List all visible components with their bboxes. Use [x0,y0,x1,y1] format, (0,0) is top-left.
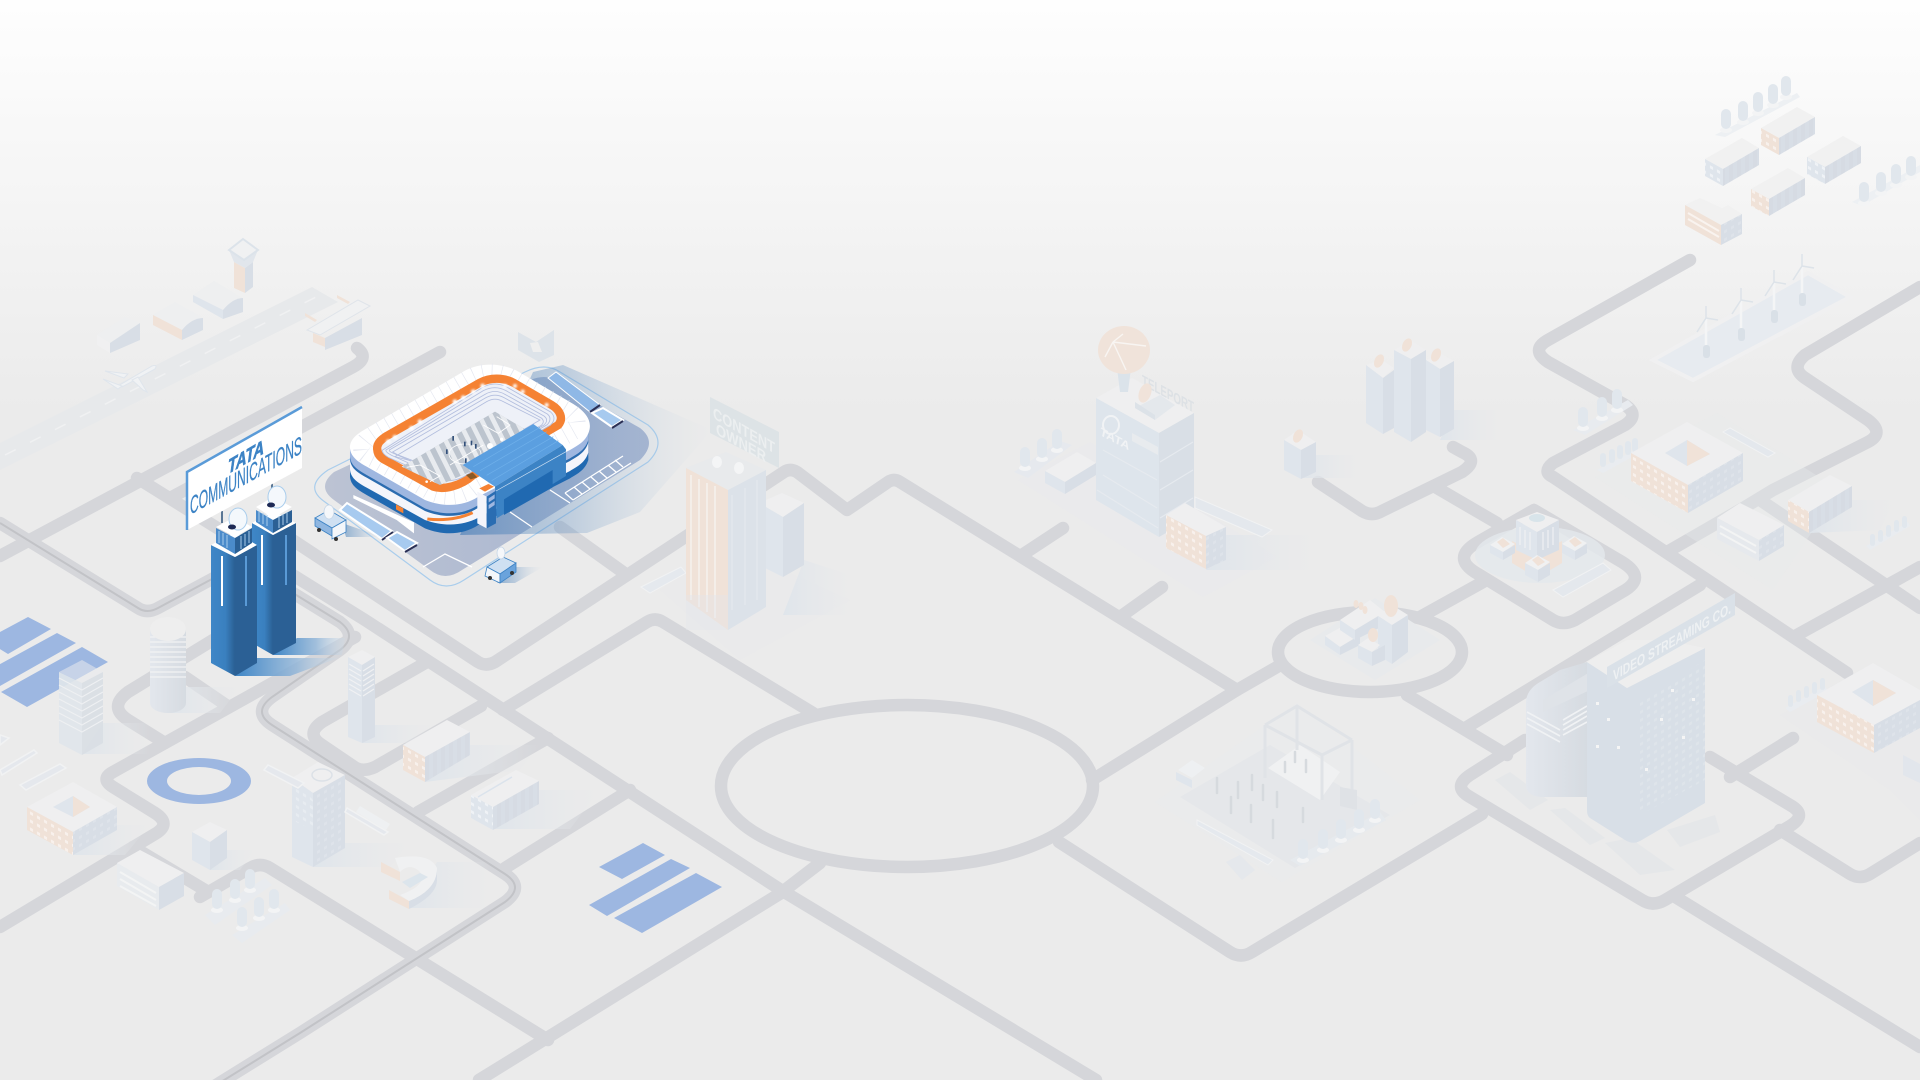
road: small ring [1278,612,1462,692]
road: fiber route [0,523,515,1080]
faded striped tower [59,660,150,755]
faded orange block far right [1788,475,1895,533]
faded courtyard building left [27,782,150,855]
slab outline [315,367,658,586]
ground plate [1018,442,1277,597]
road: diamond to big circle [503,620,813,713]
ring ground [1310,598,1440,680]
stadium periwinkle band [350,433,588,513]
trees [1597,438,1641,473]
faded office blue [471,770,600,830]
Tata Communications towers [211,482,296,676]
faded antennas near road [1573,389,1633,435]
road network [0,260,1920,1080]
faded wind farm [1653,254,1850,380]
faded block near crossing [1717,503,1784,561]
lower block [1358,638,1385,666]
turbine poles [1706,266,1802,350]
solar panels left [0,617,108,707]
orange wall sign [396,504,403,513]
shadow: tower 2 [273,638,345,655]
crowd [1217,752,1306,838]
bar [641,567,686,593]
orange ring and stands [377,379,561,488]
fibre line inside road [0,523,515,1080]
road: bottom central [479,863,820,1080]
bar [1195,497,1272,537]
content owner text line 2: OWNER [716,419,766,467]
shadow [1206,535,1315,570]
isometric city network map: COMMUNICATIONS [190,431,302,521]
brown roof gap [466,473,477,479]
stadium base [350,433,588,533]
road: ring link [1092,690,1237,780]
shadow [783,560,850,615]
road: spurs on central long road [1022,528,1162,617]
faded small dish tower [1284,428,1358,479]
faded teleport building [1014,326,1315,597]
press wall [495,445,566,518]
low box [1045,452,1096,494]
plate [1595,413,1840,590]
hub bar [1553,563,1611,597]
tower faces [686,452,766,630]
faded antenna cluster bottom left [205,869,290,943]
tower C [1426,353,1454,437]
trees [1785,678,1828,712]
bar canopies [340,372,623,552]
block 2 [1705,138,1759,186]
concert floor [1180,745,1390,868]
low stepped block [1325,625,1360,655]
antenna row 1 [1715,76,1800,137]
concert ground [1155,703,1420,882]
bar [1723,428,1775,457]
faded cylinder building [150,617,240,713]
airport [0,239,370,470]
faded ring building [1310,595,1440,680]
field markings [407,417,510,482]
road: upper left airport link [0,348,363,556]
block 4 [1751,168,1805,216]
press dark door [504,470,553,515]
block 1 [1761,107,1815,155]
hub pods [1490,536,1587,582]
side cylinder [1526,662,1590,797]
road: left zig zag [0,637,355,927]
road: branch loop near tall tower [314,662,481,770]
stage truss [1265,706,1352,800]
faded concert stage [1155,703,1420,882]
faded helipad tower [292,762,410,867]
stadium roof [350,365,590,505]
road: hub to small ring [1420,582,1483,617]
road: small ring to video loop [1407,585,1700,755]
tower dishes [1372,337,1443,369]
edge box [1903,755,1920,783]
football field [402,412,543,485]
streaming sign text: VIDEO STREAMING CO. [1613,600,1731,685]
road: top right corner road [1539,260,1847,673]
tower 1 [211,508,257,676]
players [446,436,477,463]
orange block [1166,503,1226,569]
faded small antenna row far right [1866,516,1910,550]
tower B [1394,340,1426,442]
block 5 [1685,198,1742,245]
ring dishes [1354,595,1398,642]
main tower [1587,640,1705,843]
bar 3 [548,372,600,412]
main block [1096,378,1194,537]
road: video loop [1461,740,1799,904]
plate [1780,663,1920,820]
faded tall tower [348,650,435,743]
speakers [1340,787,1357,810]
stage deck [1268,745,1340,800]
tower shadow [1440,410,1500,440]
stadium white wall [350,433,588,524]
billboard text: TATA: TATA [228,435,264,479]
block [1817,663,1920,753]
road: right corner road [1667,287,1920,552]
turbine blades [1697,254,1814,332]
stair tower [477,484,496,528]
big dish [1098,326,1150,392]
rooftop block and small dish [1135,382,1175,420]
road: video loop spurs [1677,738,1920,1047]
block 3 [1807,136,1861,184]
airplane [103,365,156,392]
bar 2 [387,532,417,552]
tower 2 [252,482,296,655]
faded hub in loop [1475,512,1611,597]
faded video streaming headquarters [1495,593,1735,875]
road: long diagonal [137,478,1096,1080]
faded office orange [403,720,540,782]
faded content owner building [641,397,850,660]
shadow: tower 1 [235,658,338,676]
road: cylinder loop [118,640,226,743]
hangar 1 [153,302,203,340]
faded curved building [381,856,490,909]
hub ground [1475,527,1605,583]
road: lower centre corner [1059,814,1482,956]
van [1176,760,1205,788]
ticket canopy [353,495,414,533]
runway [0,287,338,470]
faded small tower [192,822,255,870]
van 2 [485,547,543,583]
bar [1197,820,1273,865]
roof ribs [363,373,576,494]
shadow [460,365,712,535]
content owner sign [710,397,779,468]
stadium blue stripe [350,433,588,516]
floodlight glows [386,384,549,483]
press roof ribs [473,427,558,481]
road: hook under three towers [1318,447,1497,523]
road: short branches [418,738,630,868]
road: parking branch [560,527,627,575]
field stripes [402,414,524,484]
faded drone [518,330,554,362]
faded top right district [1685,76,1920,245]
parking lines [423,456,631,567]
content owner text: CONTENT [713,403,775,458]
terminal building [305,295,370,350]
faded wide block [117,850,184,910]
tata logo: TATA [1100,424,1129,453]
press wall line [496,452,566,491]
road: second upper link [172,352,440,497]
ground plate [660,545,850,660]
parking slab and stadium shadow [315,365,712,586]
teleport sign text: TELEPORT [1142,372,1194,416]
orange wall strip [427,513,473,520]
bar 1 [340,503,393,540]
faded courtyard building right [1595,413,1840,590]
road: hub loop [1464,510,1635,623]
hub orange wings [1512,541,1562,575]
airport box building [97,317,140,353]
press roof [463,424,563,487]
mid frame block [1340,600,1385,640]
tall block [1378,605,1408,664]
bar 4 [592,408,623,428]
hangar 2 [193,281,243,319]
concert lights row [1290,799,1386,866]
antenna row 2 [1852,156,1920,206]
press building [463,424,566,518]
solar panels centre [589,843,722,933]
plate [1653,273,1850,380]
billboard: Tata Communications [187,407,302,530]
ground panels [1495,772,1720,875]
stadium [350,365,590,533]
tower A [1366,360,1394,434]
stand tiers [383,384,554,481]
second van [1226,855,1255,880]
courtyard block [1631,422,1743,513]
road: Y road to mid network [262,470,1277,690]
streaming sign [1607,593,1735,688]
faded bars [0,735,388,835]
road: big ring [721,705,1093,867]
turbine bases [1703,293,1806,358]
blue donut [147,758,251,804]
faded courtyard building lower right [1780,663,1920,820]
faded three towers [1366,337,1500,442]
van 1 [315,505,382,541]
road: lower left [133,847,548,1040]
hub main [1516,512,1559,560]
road: far right crossing [1763,502,1920,635]
antenna row [1014,429,1072,478]
slab [325,377,649,576]
rooftop dishes [712,456,744,474]
second box [759,493,804,577]
control tower [229,239,258,293]
